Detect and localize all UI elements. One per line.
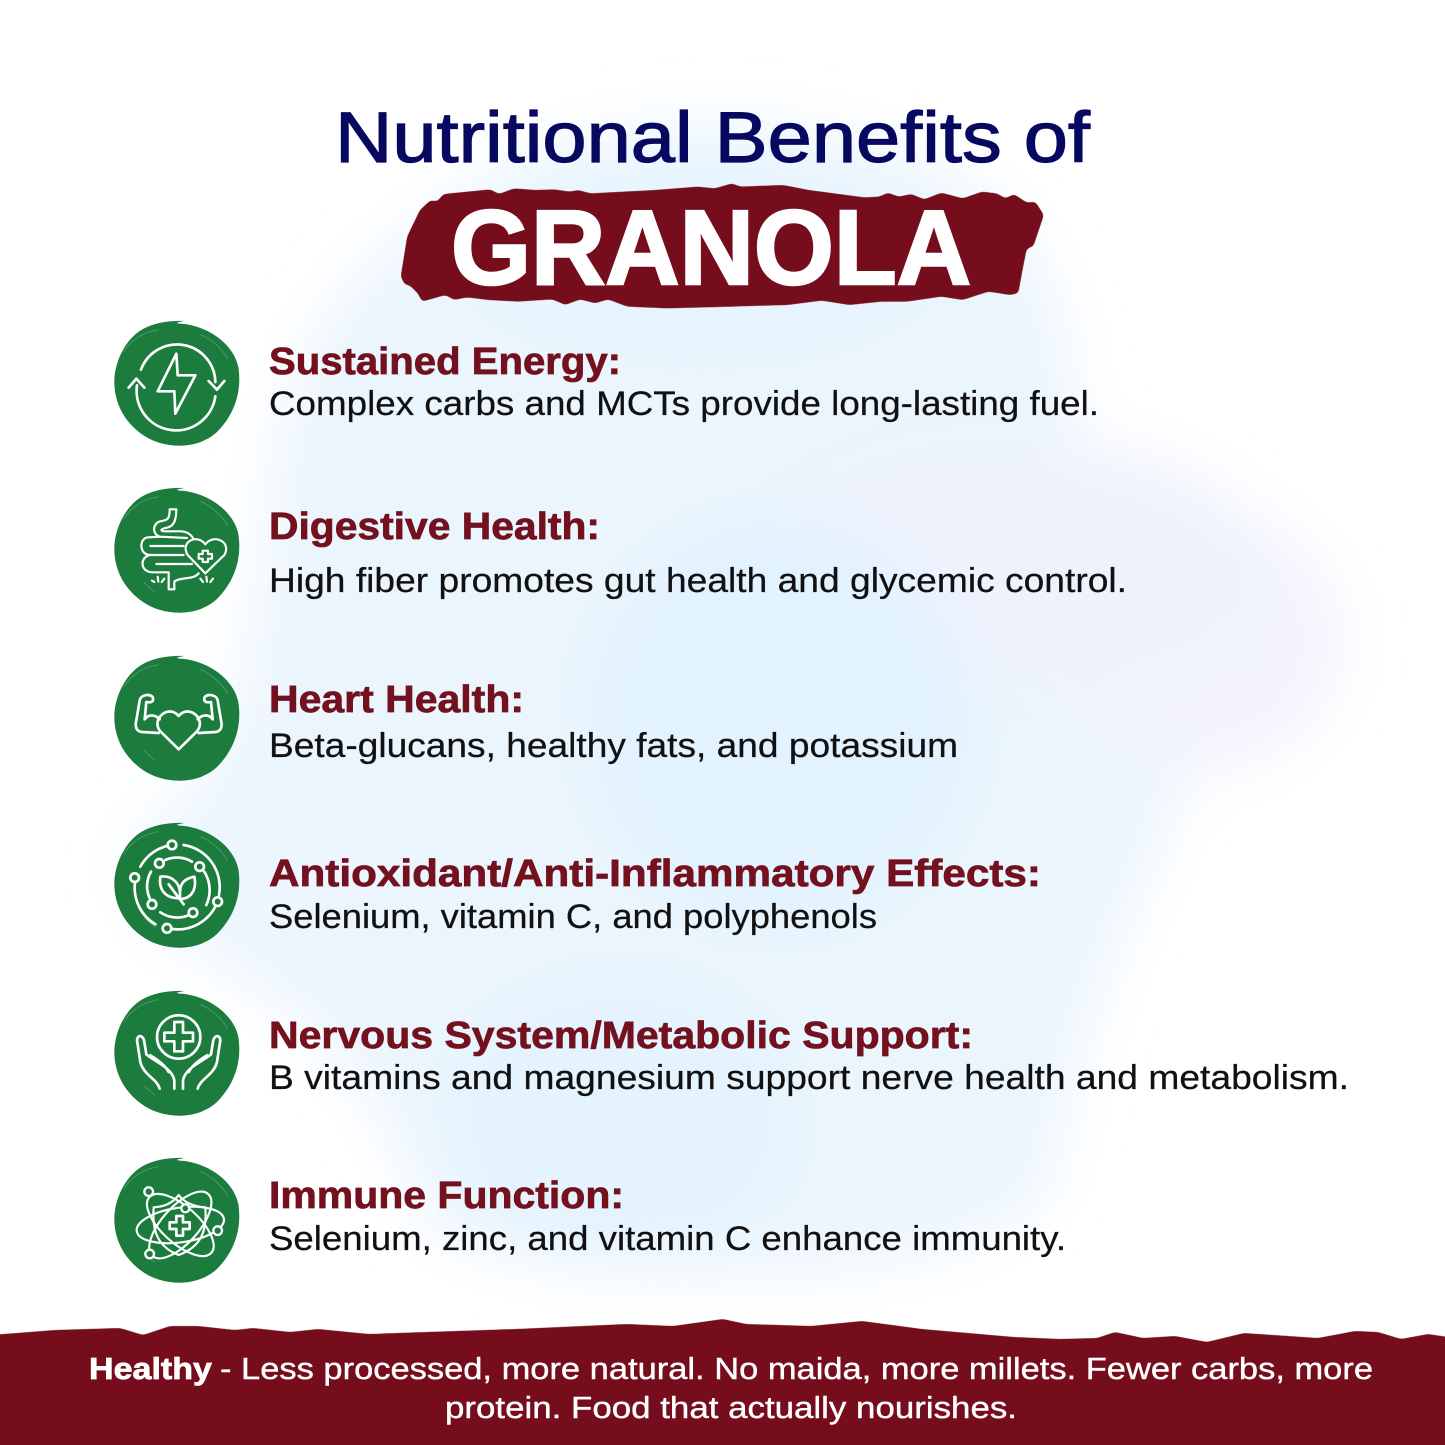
text: antioxidant effects: Selenium, vitamin C, and polyphenols	[269, 898, 877, 936]
title: Nutritional Benefits of	[335, 99, 1090, 178]
panel: antioxidant and anti-inflammatory effects	[114, 823, 1041, 948]
text: heart health: Beta-glucans, healthy fats, and potassium	[269, 727, 958, 765]
heading: digestive health: Digestive Health:	[269, 506, 600, 548]
icon: hands holding medical cross	[114, 991, 239, 1116]
icon: lightning bolt in cycle	[114, 321, 239, 446]
heading banner: GRANOLA: GRANOLA	[451, 189, 971, 307]
heading: nervous system: Nervous System/Metabolic Support:	[269, 1015, 973, 1057]
text: digestive health: High fiber promotes gut health and glycemic control.	[269, 562, 1127, 600]
heading: immune function: Immune Function:	[269, 1175, 624, 1217]
text: immune function: Selenium, zinc, and vitamin C enhance immunity.	[269, 1220, 1066, 1258]
panel: sustained energy	[114, 321, 1099, 446]
text: sustained energy: Complex carbs and MCTs provide long-lasting fuel.	[269, 385, 1099, 423]
heading: heart health: Heart Health:	[269, 679, 524, 721]
panel: immune function	[114, 1158, 1066, 1283]
footer text	[89, 1351, 1373, 1425]
heading: antioxidant effects: Antioxidant/Anti-Inflammatory Effects:	[269, 853, 1041, 895]
footer banner	[0, 1319, 1445, 1445]
icon: leaf with orbiting nodes	[114, 823, 239, 948]
icon: shield with atom orbits	[114, 1158, 239, 1283]
panel: nervous system and metabolic support	[114, 991, 1349, 1116]
footer text: protein. Food that actually nourishes.	[445, 1390, 1017, 1425]
footer text: Healthy	[89, 1351, 213, 1386]
background: watercolor wash	[130, 125, 1340, 1274]
panel: heart health	[114, 656, 958, 781]
heading: sustained energy: Sustained Energy:	[269, 341, 621, 383]
panel: digestive health	[114, 488, 1127, 613]
footer text: - Less processed, more natural. No maida, more millets. Fewer carbs, more	[220, 1351, 1373, 1386]
icon: heart with flexed arms	[114, 656, 239, 781]
text: nervous system: B vitamins and magnesium support nerve health and metabolism.	[269, 1059, 1349, 1097]
icon: gut with heart	[114, 488, 239, 613]
